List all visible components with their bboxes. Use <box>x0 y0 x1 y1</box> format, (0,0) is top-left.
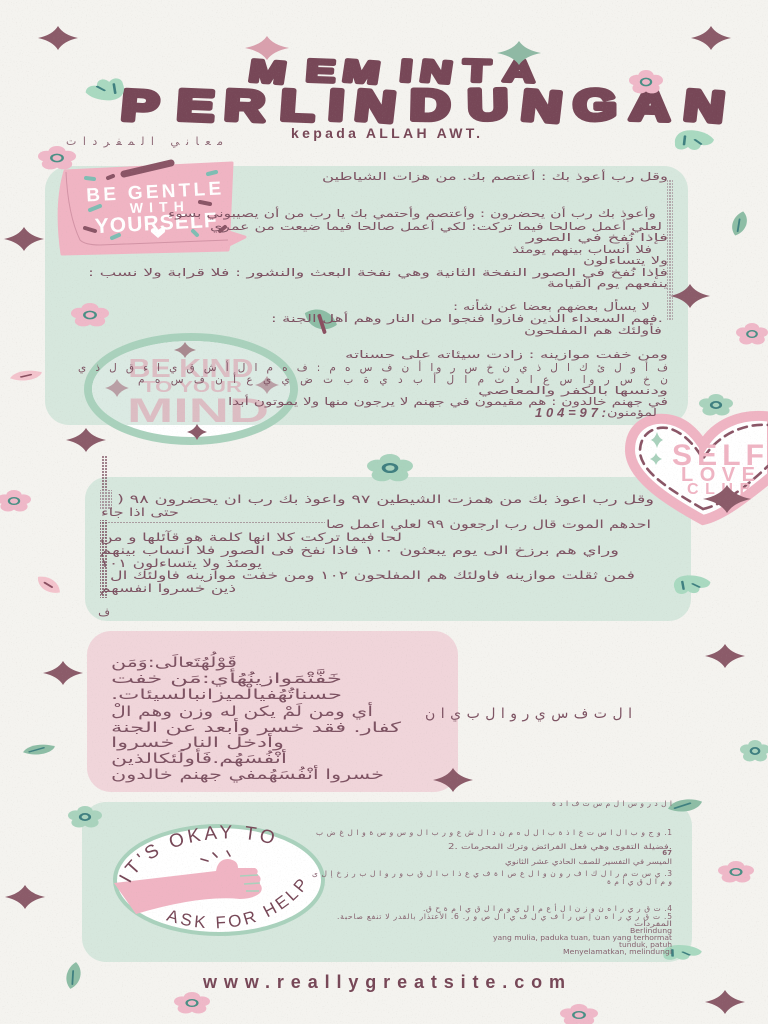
icon: flower right <box>736 323 768 344</box>
text block: pink panel tafsir: أنْفُسَهُم.فَأولَئكالذين <box>111 748 287 767</box>
sticker: self love club heart: CLUB <box>687 481 751 498</box>
text block: panel one arabic explanation: ولا يتساءلون <box>583 255 668 267</box>
icon: flower far left <box>0 490 31 511</box>
sticker: be gentle with yourself: YOURSELF <box>94 209 217 238</box>
text block: panel one arabic explanation: وقل رب أعوذ بك : أعتصم بك. من هزات الشياطين <box>322 169 668 183</box>
icon: star panel right <box>670 284 710 308</box>
text block: pink panel tafsir: حسناتُهُفيالْميزانبالسيئات. <box>111 684 342 703</box>
text block: panel one arabic explanation: فأولئك هم المفلحون <box>524 323 662 337</box>
icon: flower bottom right <box>560 1004 598 1024</box>
sticker: self love club heart: LOVE <box>681 464 755 486</box>
icon: leaf bottom left <box>61 961 86 991</box>
sticker: be gentle with yourself: WITH <box>130 198 184 216</box>
text block: pink panel tafsir: خَفَّتْمَوازينُهُأي:مَن خفت <box>111 668 342 687</box>
decorative glitch column: panel one <box>667 180 673 320</box>
sticker: be gentle with yourself <box>59 163 245 254</box>
text block: lessons learned: الميسر في التفسير للصف الحادي عشر الثانوي <box>505 857 672 866</box>
text block: lessons learned <box>312 799 672 928</box>
badge: be kind to your mind: MIND <box>127 392 269 430</box>
text block: lessons learned: و م ا ل ق ي ا م ة <box>607 877 672 886</box>
text block: panel one arabic explanation: لعلي أعمل صالحا فيما تركت: لكي أعمل صالحا فيما ضيعت من عمري <box>210 219 662 233</box>
text block: panel one arabic explanation: فلا أنساب بينهم يومئذ <box>512 242 652 256</box>
text block: panel two quranic verses: فمن ثقلت موازينه فاولئك هم المفلحون ١٠٢ ومن خفت موازينه فاولئك ال <box>110 568 635 583</box>
icon: flower lower right <box>718 861 754 882</box>
icon: pink leaf lower left <box>35 572 62 597</box>
text block: panel two quranic verses: وقل رب اعوذ بك من همزت الشيطين ٩٧ واعوذ بك رب ان يحضرون ٩٨ ( <box>117 492 654 507</box>
text block: tafsir and explanation heading: ا ل ت ف س ي ر و ا ل ب ي ا ن <box>425 706 632 722</box>
text block: panel two quranic verses: احدهم الموت قال رب ارجعون ٩٩ لعلي اعمل صا <box>326 517 651 532</box>
icon: pink leaf left <box>10 371 42 381</box>
text block: vocabulary meanings: Berlindung <box>630 927 672 935</box>
text block: pink panel tafsir: وأدخل النار خسروا <box>111 733 284 751</box>
icon: flower by title right <box>629 70 663 93</box>
sticker: self love club heart <box>630 416 768 520</box>
text block: panel two quranic verses: وراي هم برزخ الى يوم يبعثون ١٠٠ فاذا نفخ فى الصور فلا انساب بينهم <box>100 543 619 558</box>
icon: leaf cluster by title <box>83 77 127 103</box>
text block: lessons learned: ا ل د ر و س ا ل م س ت ف ا د ة <box>552 799 672 808</box>
text block: lessons learned: 3. ي س ت م ر ا ل ك ا ف ر و ن و ا ل ع ص ا ة ف ي ع ذ ا ب ا ل ق ب و ر و ا ل ب ر ز خ إ ل ى <box>312 869 672 878</box>
text block: panel one arabic explanation: لمؤمنون <box>607 407 657 419</box>
text block: panel two quranic verses <box>98 492 654 619</box>
icon: green star by title <box>497 41 541 65</box>
text block: panel one arabic explanation: لا يسأل بعضهم بعضا عن شأنه : <box>453 299 650 313</box>
text block: lessons learned: المفردات <box>634 919 672 928</box>
badge: it's okay to ask for help <box>113 824 325 936</box>
text block: pink panel tafsir: أي ومن لَمْ يكن له وزن وهم الْ <box>111 702 373 720</box>
icon: leaf cluster top right <box>675 130 714 150</box>
icon: leaf right of first panel <box>726 210 753 237</box>
badge: be kind to your mind: TO YOUR <box>142 379 243 396</box>
panel: second green text panel <box>85 477 691 621</box>
icon: leaf inside first panel <box>302 301 339 337</box>
panel: first green text panel <box>45 166 688 425</box>
panel: lessons and vocabulary panel <box>82 802 692 962</box>
text block: panel one arabic explanation: وأعوذ بك رب أن يحضرون : وأعتصم وأحتمي بك يا رب من أن يصيبوني بسوء <box>168 206 656 220</box>
text block: lessons learned: 5. ت ق ر ي ر ا ه ن إ س ر ا ف ي ل ف ي ا ل ص و ر. 6. الأعتذار بالقدر لا تنفع صاحبة. <box>337 911 672 921</box>
text block: panel two quranic verses: ذين خسروا انفسهم <box>100 581 236 596</box>
text block: panel two quranic verses: يومئذ ولا يتساءلون ١٠١ <box>100 556 262 571</box>
text block: pink panel tafsir: خسروا أنْفُسَهُمفي جهنم خالدون <box>111 765 384 783</box>
icon: star tafsir corner <box>433 768 473 792</box>
icon: leaf cluster right of panel two <box>671 573 713 595</box>
text block: lessons learned: .فضيلة التقوى وهي فعل الفرائض وترك المحرمات .2 <box>448 842 672 851</box>
text block: pink panel tafsir <box>111 652 402 783</box>
text block: panel two quranic verses: لحا فيما تركت كلا انها كلمة هو قآئلها و من <box>100 530 402 545</box>
text block: panel two quranic verses: حتى اذا جاء <box>101 505 179 519</box>
icon: green flower right <box>699 394 733 415</box>
icon: star right of tafsir <box>705 644 745 668</box>
text block: lessons learned: 4. ت ق ر ي ر ا ه ن و ز ن ا ل أ ع م ا ل ي و م ا ل ق ي ا م ة ح ق. <box>423 903 672 913</box>
text block: lessons learned: 67 <box>662 849 672 857</box>
footer website: www.reallygreatsite.com <box>202 972 565 992</box>
text block: panel one arabic explanation: ن خ س ر وا س ع ا د ت م ا ل أ ب د ي ة ب ت ض ي ي ع أ ن ف س ه م <box>138 372 668 386</box>
text block: panel one arabic explanation: ف أ و ل ئ ك ا ل ذ ي ن خ س ر وا أ ن ف س ه م : ف ه م ا ل أ ش ق ي ا ء ق ل ذ ي <box>78 360 668 374</box>
text block: panel one arabic explanation: ومن خفت موازينه : زادت سيئاته على حسناته <box>345 349 668 361</box>
text block: panel one arabic explanation: ودنسها بالكفر والمعاصي <box>478 385 668 397</box>
icon: green flower centre <box>367 454 413 481</box>
text block: panel one arabic explanation: في جهنم خالدون : هم مقيمون في جهنم لا يرجون منها ولا يموتون أبدا <box>228 394 668 408</box>
sticker: self love club heart: SELF <box>672 439 764 472</box>
badge: it's okay to ask for help: IT'S OKAY TO <box>119 825 274 882</box>
title <box>119 54 727 132</box>
text block: lessons learned: 1. و ج و ب ا ل ا س ت ع ا ذ ة ب ا ل ل ه م ن د ا ل ش ع و ر ب ا ل و س و س ة و ا ل غ ض ب <box>316 828 672 837</box>
decorative glitch column: panel two <box>100 455 325 598</box>
text block: panel one arabic explanation: فإذا نُفخ في الصور النفخة الثانية وهي نفخة البعث والنشور : فلا قرابة ولا نسب : <box>88 267 668 279</box>
icon: star left of tafsir <box>43 661 83 685</box>
text block: pink panel tafsir: قَوْلُهُتَعالَى:وَمَن <box>111 652 237 671</box>
icon: leaf panel four top <box>668 799 702 812</box>
icon: star under circle <box>66 428 106 452</box>
badge: be kind to your mind: BE KIND <box>128 353 254 383</box>
icon: green flower panel four <box>68 806 102 827</box>
text block: panel one arabic explanation: ينفعهم يوم القيامة <box>547 278 668 290</box>
text block: pink panel tafsir: كفار. فقد خسر وأبعد عن الجنة <box>111 718 402 736</box>
title line: PERLINDUNGAN: PERLINDUNGAN <box>119 80 727 132</box>
icon: decorative star top right <box>691 26 731 50</box>
text block: panel one arabic explanation: .فهم السعداء الذين فازوا فنجوا من النار وهم أهل الجنة : <box>271 311 663 325</box>
title line: MEMINTA: MEMINTA <box>247 54 536 91</box>
badge: it's okay to ask for help: ASK FOR HELP <box>166 879 304 928</box>
text block: vocabulary meanings: Menyelamatkan, melindungi <box>563 948 672 956</box>
section label: vocabulary meaning: معاني المفردات <box>66 135 223 148</box>
text block: panel one arabic explanation: فإذا نُفخ في الصور <box>524 232 668 244</box>
icon: flower left <box>71 303 109 326</box>
sticker: be gentle with yourself: BE GENTLE <box>86 178 222 207</box>
text block: vocabulary meanings: yang mulia, paduka tuan, tuan yang terhormat <box>493 934 672 942</box>
text block: panel two quranic verses: ف <box>98 605 110 619</box>
icon: star bottom right <box>705 990 745 1014</box>
icon: green flower far right <box>740 740 768 761</box>
badge: be kind to your mind <box>88 337 294 441</box>
icon: flower bottom left <box>174 992 210 1013</box>
icon: decorative star top left <box>38 26 78 50</box>
text block: panel one arabic explanation <box>78 169 668 419</box>
text block: vocabulary meanings: tunduk, patuh <box>619 941 672 949</box>
verse reference number: 104=97: <box>535 405 606 420</box>
icon: star bottom left <box>5 885 45 909</box>
text block: vocabulary meanings <box>493 927 672 956</box>
icon: star left <box>4 227 44 251</box>
icon: flower top of panel <box>38 146 76 169</box>
icon: pink star by title <box>245 36 289 60</box>
icon: leaf left <box>23 745 55 755</box>
icon: leaf panel four bottom <box>661 944 703 960</box>
panel: pink tafsir panel <box>87 631 458 792</box>
subtitle: kepada ALLAH AWT. <box>291 125 480 141</box>
